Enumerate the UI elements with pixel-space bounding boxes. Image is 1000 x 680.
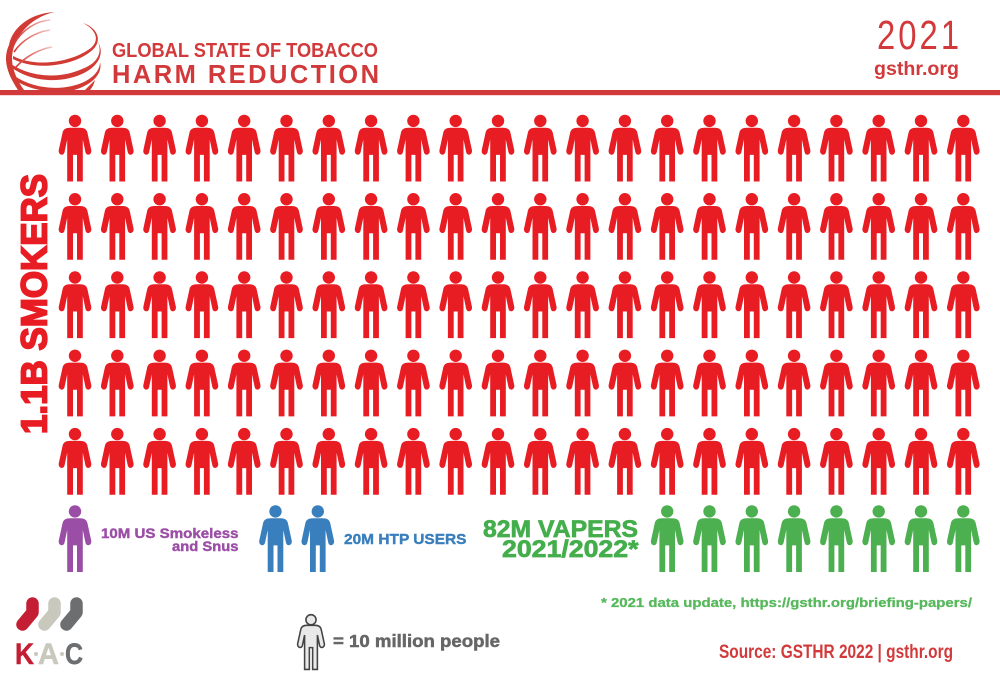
label: vapers: 82M VAPERS [483, 516, 638, 543]
footnote: * 2021 data update, https://gsthr.org/briefing-papers/ [601, 595, 972, 610]
pictogram: HTP users [259, 505, 334, 572]
legend: text: = 10 million people [333, 631, 500, 651]
header rule [0, 90, 1000, 95]
legend: person icon [298, 615, 324, 669]
row 2 of smokers [59, 193, 980, 260]
KAC letters: K [15, 638, 34, 671]
pictogram: smokers [59, 115, 980, 495]
title: GLOBAL STATE OF TOBACCO [112, 40, 378, 62]
year and site: gsthr.org [874, 59, 959, 80]
label: smokeless and snus: 10M US Smokeless [101, 525, 239, 541]
logo: globe [6, 12, 101, 91]
vertical label: 1.1B smokers: 1.1B SMOKERS [13, 174, 54, 434]
row 4 of smokers [59, 350, 980, 416]
row 5 of smokers [59, 428, 980, 495]
label: smokeless and snus [101, 525, 239, 554]
row 3 of smokers [59, 271, 980, 338]
sock marks [22, 604, 76, 624]
pictogram: smokeless and snus [59, 505, 91, 572]
logo: KAC [15, 604, 83, 671]
label: vapers: 2021/2022* [502, 536, 639, 563]
label: smokeless and snus: and Snus [172, 538, 239, 554]
label: HTP users: 20M HTP USERS [344, 532, 467, 548]
year and site [874, 11, 962, 80]
KAC letters [15, 638, 83, 671]
pictogram: vapers [651, 505, 980, 572]
KAC letters: A [38, 638, 59, 671]
source: Source: GSTHR 2022 | gsthr.org [719, 642, 953, 663]
year and site: 2021 [877, 11, 962, 58]
row 1 of smokers [59, 115, 980, 182]
label: vapers [483, 516, 639, 563]
title [112, 40, 379, 89]
KAC letters: C [65, 638, 83, 671]
title: HARM REDUCTION [112, 61, 379, 89]
